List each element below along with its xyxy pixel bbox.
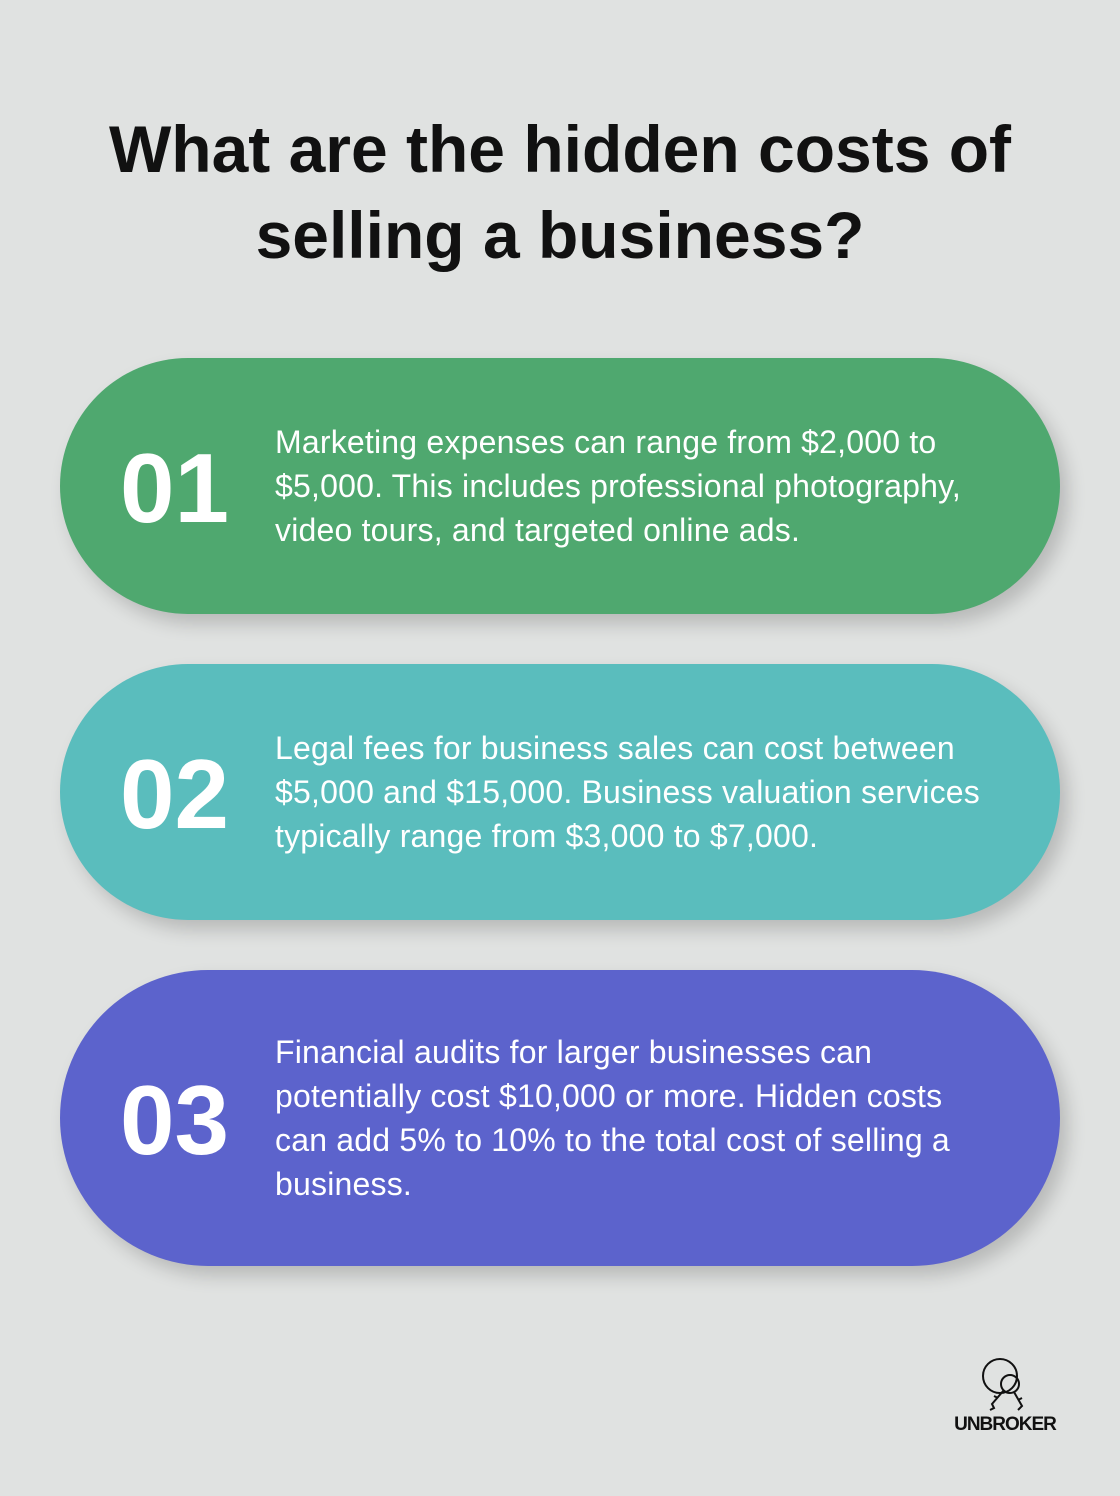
number 02: 02	[120, 739, 229, 849]
brand name: UNBROKER	[954, 1414, 1056, 1435]
icon: keys	[982, 1358, 1024, 1411]
panel: marketing	[60, 358, 1060, 614]
text: marketing	[275, 424, 961, 548]
title: What are the hidden costs of	[109, 112, 1011, 186]
title: selling a business?	[256, 198, 864, 272]
text: audits: can add 5% to 10% to the total cost of selling a	[275, 1122, 950, 1158]
text: legal: typically range from $3,000 to $7,000.	[275, 818, 818, 854]
text: marketing: Marketing expenses can range from $2,000 to	[275, 424, 936, 460]
number 03: 03	[120, 1065, 229, 1175]
text: audits	[275, 1034, 950, 1202]
text: legal: Legal fees for business sales can cost between	[275, 730, 955, 766]
text: audits: potentially cost $10,000 or more. Hidden costs	[275, 1078, 942, 1114]
panel: audits	[60, 970, 1060, 1266]
number 01: 01	[120, 433, 229, 543]
logo	[954, 1358, 1056, 1435]
text: audits: Financial audits for larger businesses can	[275, 1034, 872, 1070]
title	[109, 112, 1012, 272]
panel: legal	[60, 664, 1060, 920]
text: legal	[275, 730, 980, 854]
text: audits: business.	[275, 1166, 412, 1202]
text: marketing: $5,000. This includes professional photography,	[275, 468, 961, 504]
text: legal: $5,000 and $15,000. Business valuation services	[275, 774, 980, 810]
text: marketing: video tours, and targeted online ads.	[275, 512, 800, 548]
